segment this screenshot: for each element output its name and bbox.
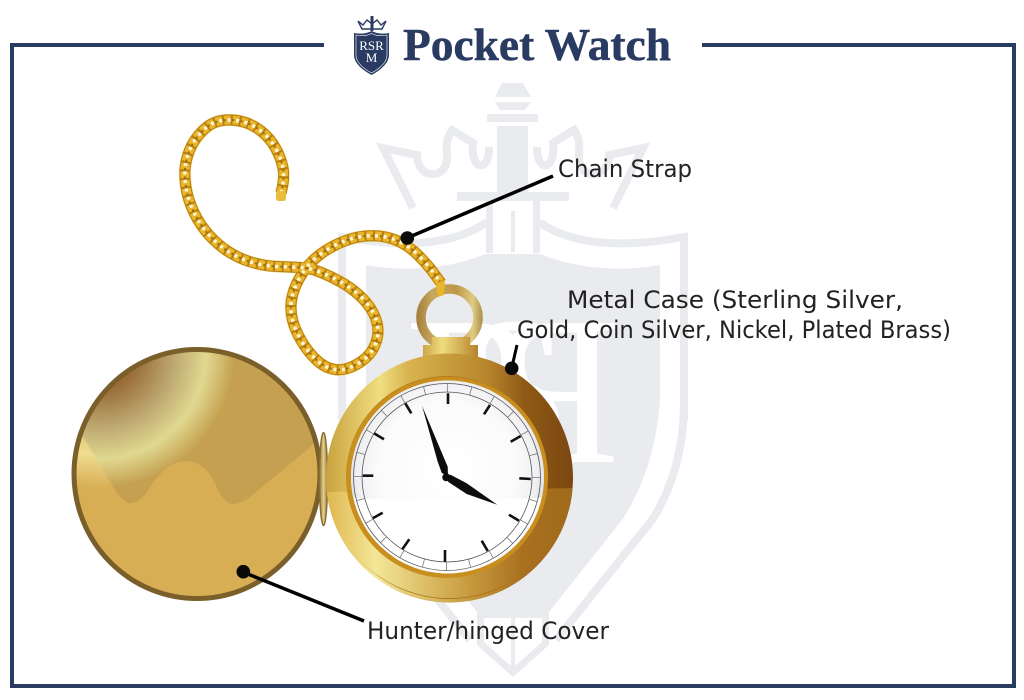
title: Pocket Watch bbox=[403, 19, 671, 70]
header logo: shield and crown: RSR bbox=[359, 38, 384, 53]
label: hunter cover: Hunter/hinged Cover bbox=[367, 617, 609, 645]
watermark: shield logo: R bbox=[405, 273, 547, 508]
label: metal case: Gold, Coin Silver, Nickel, Plated Brass) bbox=[517, 316, 951, 344]
dial bbox=[351, 380, 544, 574]
header logo: shield and crown: M bbox=[366, 50, 378, 65]
hinge bbox=[320, 432, 328, 526]
hour ticks bbox=[363, 393, 531, 562]
leader: hunter cover bbox=[236, 565, 364, 621]
bow ring bbox=[421, 289, 478, 346]
leader: metal case bbox=[505, 345, 518, 375]
label: metal case: Metal Case (Sterling Silver, bbox=[567, 286, 903, 314]
header logo: shield and crown bbox=[354, 16, 389, 75]
clock hands bbox=[422, 406, 497, 505]
inner bezel bbox=[346, 376, 548, 578]
label: chain strap: Chain Strap bbox=[558, 155, 692, 183]
metal case bbox=[320, 354, 580, 610]
watermark: shield logo: R bbox=[479, 273, 621, 508]
watermark: shield logo: S bbox=[454, 273, 572, 508]
pocket watch bbox=[320, 280, 580, 610]
chain clasp bbox=[436, 280, 445, 297]
crown stem bbox=[423, 337, 478, 359]
watermark: shield logo bbox=[342, 83, 684, 677]
leader: chain strap bbox=[400, 176, 553, 245]
hunter hinged cover bbox=[70, 340, 330, 598]
chain strap bbox=[185, 120, 441, 370]
